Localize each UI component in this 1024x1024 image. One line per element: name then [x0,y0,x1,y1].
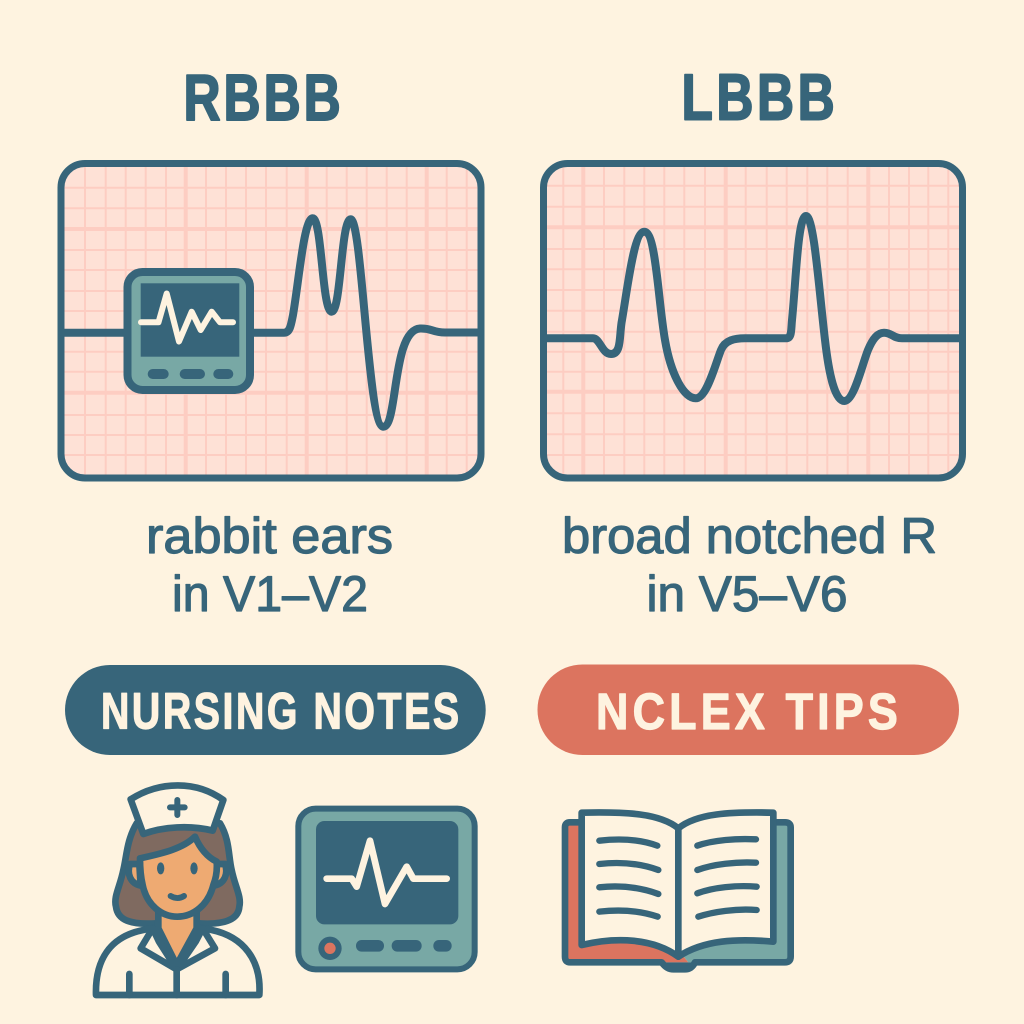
caption: RBBB: in V1–V2 [172,566,368,622]
caption: RBBB [146,508,393,622]
nurse hair [115,823,240,924]
nurse coat [96,927,260,995]
heading: RBBB: RBBB [184,62,341,134]
icon: patient monitor [298,809,475,969]
nurse ears [129,864,226,886]
nurse collar [141,928,215,969]
caption: LBBB: in V5–V6 [646,566,848,622]
caption: RBBB: rabbit ears [146,508,393,564]
nurse cap [131,785,223,834]
panel: LBBB ECG strip [540,160,965,480]
icon: nurse [96,785,260,995]
book pages [582,812,678,957]
nurse neck [158,912,197,965]
caption: LBBB [562,508,937,622]
icon: open book [565,812,791,969]
pill: NCLEX tips: NCLEX TIPS [596,684,898,741]
LBBB waveform: broad notched R [546,216,960,401]
pill: NCLEX tips [538,664,959,755]
RBBB waveform: rabbit ears [63,218,480,427]
icon: small monitor [128,272,250,390]
pill: nursing notes: NURSING NOTES [101,682,459,740]
panel: RBBB ECG strip [60,160,482,480]
heading: LBBB: LBBB [682,62,835,134]
pill: nursing notes [65,665,486,755]
nurse face [140,837,217,917]
caption: LBBB: broad notched R [562,508,937,564]
